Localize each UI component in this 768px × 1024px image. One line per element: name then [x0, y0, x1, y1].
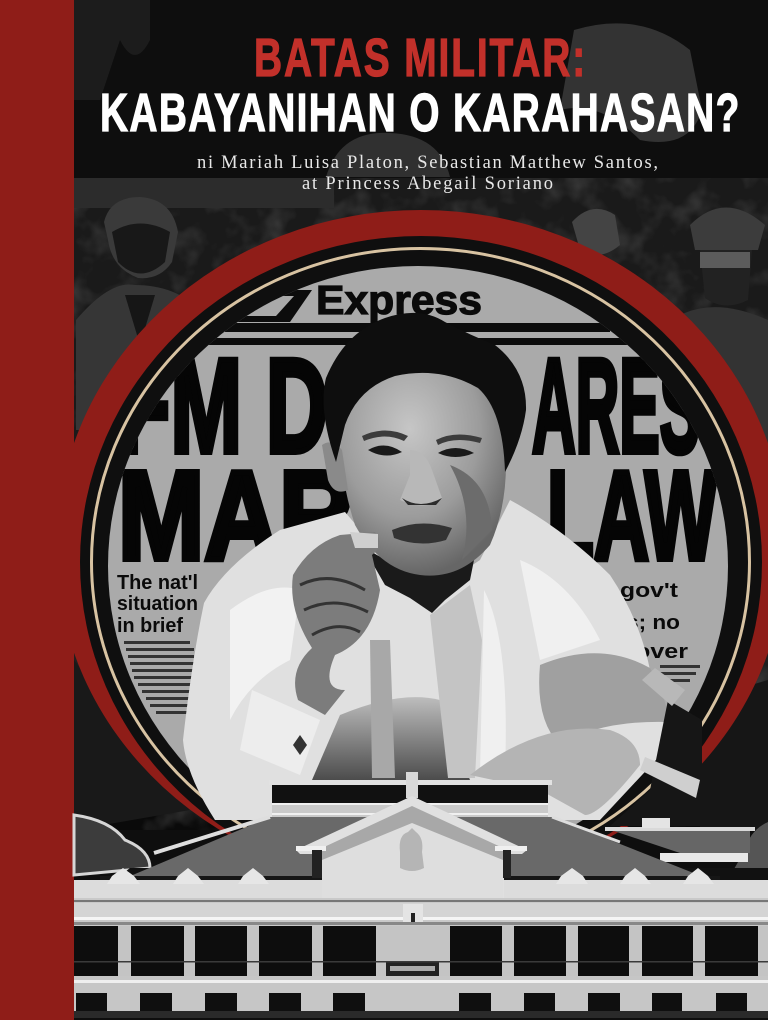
subhead right: over	[635, 641, 688, 663]
headline: martial law	[122, 469, 716, 562]
portrait of Ferdinand Marcos	[183, 313, 702, 826]
upper windows	[74, 926, 758, 976]
subhead right: s; no	[626, 612, 680, 634]
roof eave shadow	[100, 876, 720, 880]
lower windows	[76, 993, 747, 1011]
shirt shadows	[230, 560, 668, 815]
right annex roof	[605, 828, 750, 853]
headline: FM declares: FM D	[118, 332, 328, 481]
headline: martial law: MAR	[118, 445, 354, 586]
coat of arms	[400, 828, 424, 871]
microphones	[610, 668, 702, 826]
mouth	[392, 523, 452, 544]
upper structure	[269, 772, 552, 817]
red sidebar	[0, 0, 74, 1020]
title line: Batas Militar: BATAS MILITAR:	[254, 27, 585, 87]
trees at palace sides	[74, 815, 768, 876]
dark foliage bottom left	[74, 681, 188, 824]
center balcony	[386, 961, 439, 976]
face	[340, 366, 506, 576]
headline: FM declares	[130, 356, 698, 456]
hair	[324, 313, 526, 472]
red ring	[56, 210, 768, 888]
eyes	[362, 430, 482, 457]
barong shirt	[183, 500, 670, 820]
masthead	[208, 285, 628, 345]
subhead left	[117, 574, 197, 632]
byline: at Princess Abegail Soriano	[302, 174, 553, 194]
Malacañang Palace	[74, 772, 768, 1018]
soldiers right	[572, 208, 768, 442]
title	[100, 27, 739, 142]
title line: Kabayanihan o Karahasan: KABAYANIHAN O KARAHASAN?	[100, 82, 739, 142]
colonnade wall	[74, 926, 768, 986]
ear	[322, 442, 348, 492]
cufflink	[293, 735, 307, 755]
lower storey wall	[74, 976, 768, 1012]
masthead: Express	[316, 277, 482, 323]
column body text	[124, 641, 700, 714]
subhead right: gov't	[620, 580, 678, 602]
soldier left	[76, 197, 179, 430]
dormers	[107, 868, 714, 884]
subhead left: in brief	[117, 615, 183, 637]
cream inner ring	[92, 248, 750, 876]
entablature	[74, 898, 768, 926]
neck shadow	[362, 540, 478, 613]
byline: ni Mariah Luisa Platon, Sebastian Matthew Santos,	[197, 153, 658, 173]
main roof	[128, 817, 696, 880]
byline	[197, 153, 658, 194]
subhead right	[621, 583, 688, 658]
subhead left: The nat'l	[117, 572, 198, 594]
subhead left: situation	[117, 593, 198, 615]
dark behind main roof edge	[115, 868, 768, 884]
balcony rail	[74, 961, 768, 962]
cornice band	[74, 880, 768, 898]
hedge	[74, 1011, 768, 1018]
central pediment	[296, 796, 527, 898]
newspaper front page	[108, 266, 728, 824]
raised hand	[292, 532, 380, 715]
nose	[400, 450, 442, 506]
